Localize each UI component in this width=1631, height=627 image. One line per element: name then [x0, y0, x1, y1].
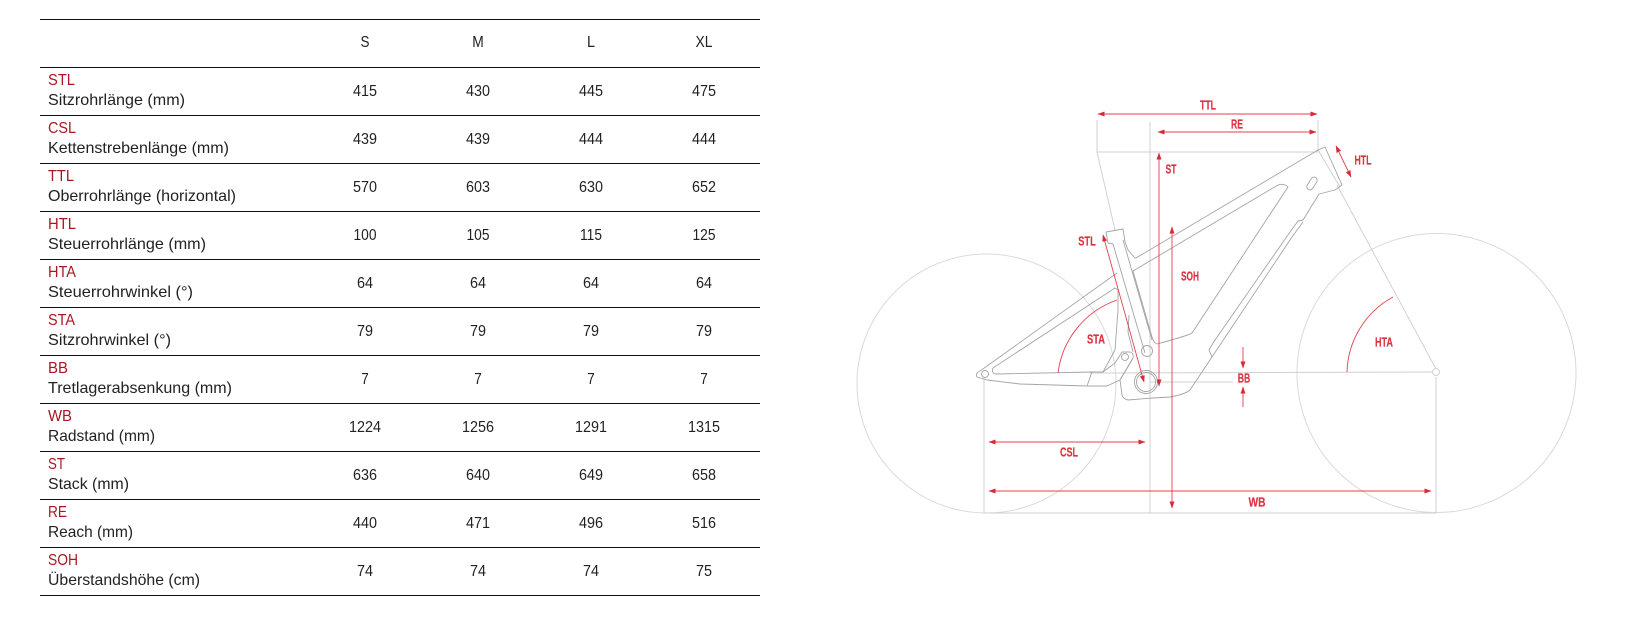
row: RE: 471 [466, 515, 490, 532]
table header row: XL [696, 34, 713, 51]
row: HTA: 64 [583, 275, 599, 292]
row: ST: 649 [579, 467, 603, 484]
row: TTL: Oberrohrlänge (horizontal) [48, 188, 236, 205]
row: HTL: 115 [580, 227, 602, 244]
row: STA: 79 [696, 323, 712, 340]
row: HTL: 125 [692, 227, 716, 244]
table header row [40, 20, 760, 68]
row: ST: 640 [466, 467, 490, 484]
row: STL: 415 [353, 83, 377, 100]
row: CSL: 444 [692, 131, 716, 148]
row: TTL [40, 168, 760, 212]
row: HTL [40, 216, 760, 260]
row: WB: WB [48, 408, 72, 425]
row: BB: 7 [474, 371, 482, 388]
row: STL [40, 72, 760, 116]
dimension: BB [1238, 347, 1250, 407]
rear triangle [976, 273, 1152, 386]
angle: HTA: HTA [1375, 336, 1393, 350]
row: HTA [40, 264, 760, 308]
row: STA: STA [48, 312, 75, 329]
row: HTA: 64 [470, 275, 486, 292]
row: BB [40, 360, 760, 404]
bottom bracket [1134, 370, 1158, 394]
dimension: SOH: SOH [1181, 270, 1199, 284]
row: STA: 79 [357, 323, 373, 340]
row: TTL: 603 [466, 179, 490, 196]
row: BB: BB [48, 360, 68, 377]
row: SOH: 75 [696, 563, 712, 580]
row: RE [40, 504, 760, 548]
row: STA: Sitzrohrwinkel (°) [48, 332, 171, 349]
row: ST [40, 456, 760, 500]
dimension: RE: RE [1231, 118, 1243, 132]
row: SOH: Überstandshöhe (cm) [48, 571, 200, 589]
row: WB: 1291 [575, 419, 607, 436]
row: HTA: 64 [357, 275, 373, 292]
row: STL: 475 [692, 83, 716, 100]
angle: HTA [1347, 297, 1393, 372]
row: WB: 1224 [349, 419, 381, 436]
row: CSL: 444 [579, 131, 603, 148]
dimension: STL [1078, 234, 1144, 382]
row: RE: 496 [579, 515, 603, 532]
row: HTA: HTA [48, 264, 76, 281]
row: HTL: HTL [48, 216, 76, 233]
dimension: HTL [1336, 146, 1372, 177]
frame outline [1106, 147, 1342, 400]
row: HTL: 105 [466, 227, 490, 244]
row: BB: 7 [700, 371, 708, 388]
row: HTL: Steuerrohrlänge (mm) [48, 236, 206, 253]
table header row: S [360, 34, 370, 51]
front wheel [1297, 234, 1576, 512]
row: TTL: 630 [579, 179, 603, 196]
row: WB: 1256 [462, 419, 494, 436]
row: CSL [40, 120, 760, 164]
row: STA [40, 312, 760, 356]
row: HTA: 64 [696, 275, 712, 292]
row: ST: ST [48, 456, 65, 473]
row: CSL: 439 [353, 131, 377, 148]
row: BB: Tretlagerabsenkung (mm) [48, 380, 232, 397]
row: RE: 516 [692, 515, 716, 532]
row: CSL: CSL [48, 120, 76, 137]
row: RE: 440 [353, 515, 377, 532]
rear wheel [857, 254, 1116, 513]
bike geometry diagram [857, 98, 1576, 513]
row: STL: STL [48, 72, 75, 89]
row: STA: 79 [583, 323, 599, 340]
row: STL: 445 [579, 83, 603, 100]
row: STL: 430 [466, 83, 490, 100]
dimension: HTL: HTL [1354, 154, 1372, 168]
row: WB [40, 408, 760, 452]
row: SOH: SOH [48, 552, 78, 569]
row: WB: 1315 [688, 419, 720, 436]
row: HTA: Steuerrohrwinkel (°) [48, 284, 193, 301]
row: TTL: TTL [48, 168, 74, 185]
dimension: CSL: CSL [1060, 446, 1078, 460]
row: TTL: 652 [692, 179, 716, 196]
dimension: WB: WB [1248, 496, 1266, 510]
row: ST: 636 [353, 467, 377, 484]
angle: STA: STA [1087, 332, 1105, 346]
row: SOH [40, 552, 760, 596]
row: TTL: 570 [353, 179, 377, 196]
row: ST: Stack (mm) [48, 476, 129, 493]
row: SOH: 74 [583, 563, 599, 580]
geometry table [40, 20, 760, 596]
row: BB: 7 [361, 371, 369, 388]
row: SOH: 74 [357, 563, 373, 580]
table header row: L [587, 34, 595, 51]
row: STA: 79 [470, 323, 486, 340]
construction lines [984, 120, 1440, 513]
angle: STA [1058, 300, 1117, 373]
row: SOH: 74 [470, 563, 486, 580]
row: HTL: 100 [354, 227, 377, 244]
row: WB: Radstand (mm) [48, 428, 155, 445]
row: CSL: Kettenstrebenlänge (mm) [48, 140, 229, 157]
table header row: M [472, 34, 484, 51]
row: CSL: 439 [466, 131, 490, 148]
dimension: ST: ST [1166, 162, 1177, 176]
row: ST: 658 [692, 467, 716, 484]
dimension: TTL: TTL [1200, 98, 1216, 112]
row: RE: RE [48, 504, 67, 521]
dimension: BB: BB [1238, 372, 1250, 386]
row: STL: Sitzrohrlänge (mm) [48, 92, 185, 109]
row: RE: Reach (mm) [48, 524, 133, 541]
dimension: STL: STL [1078, 234, 1096, 248]
row: BB: 7 [587, 371, 595, 388]
